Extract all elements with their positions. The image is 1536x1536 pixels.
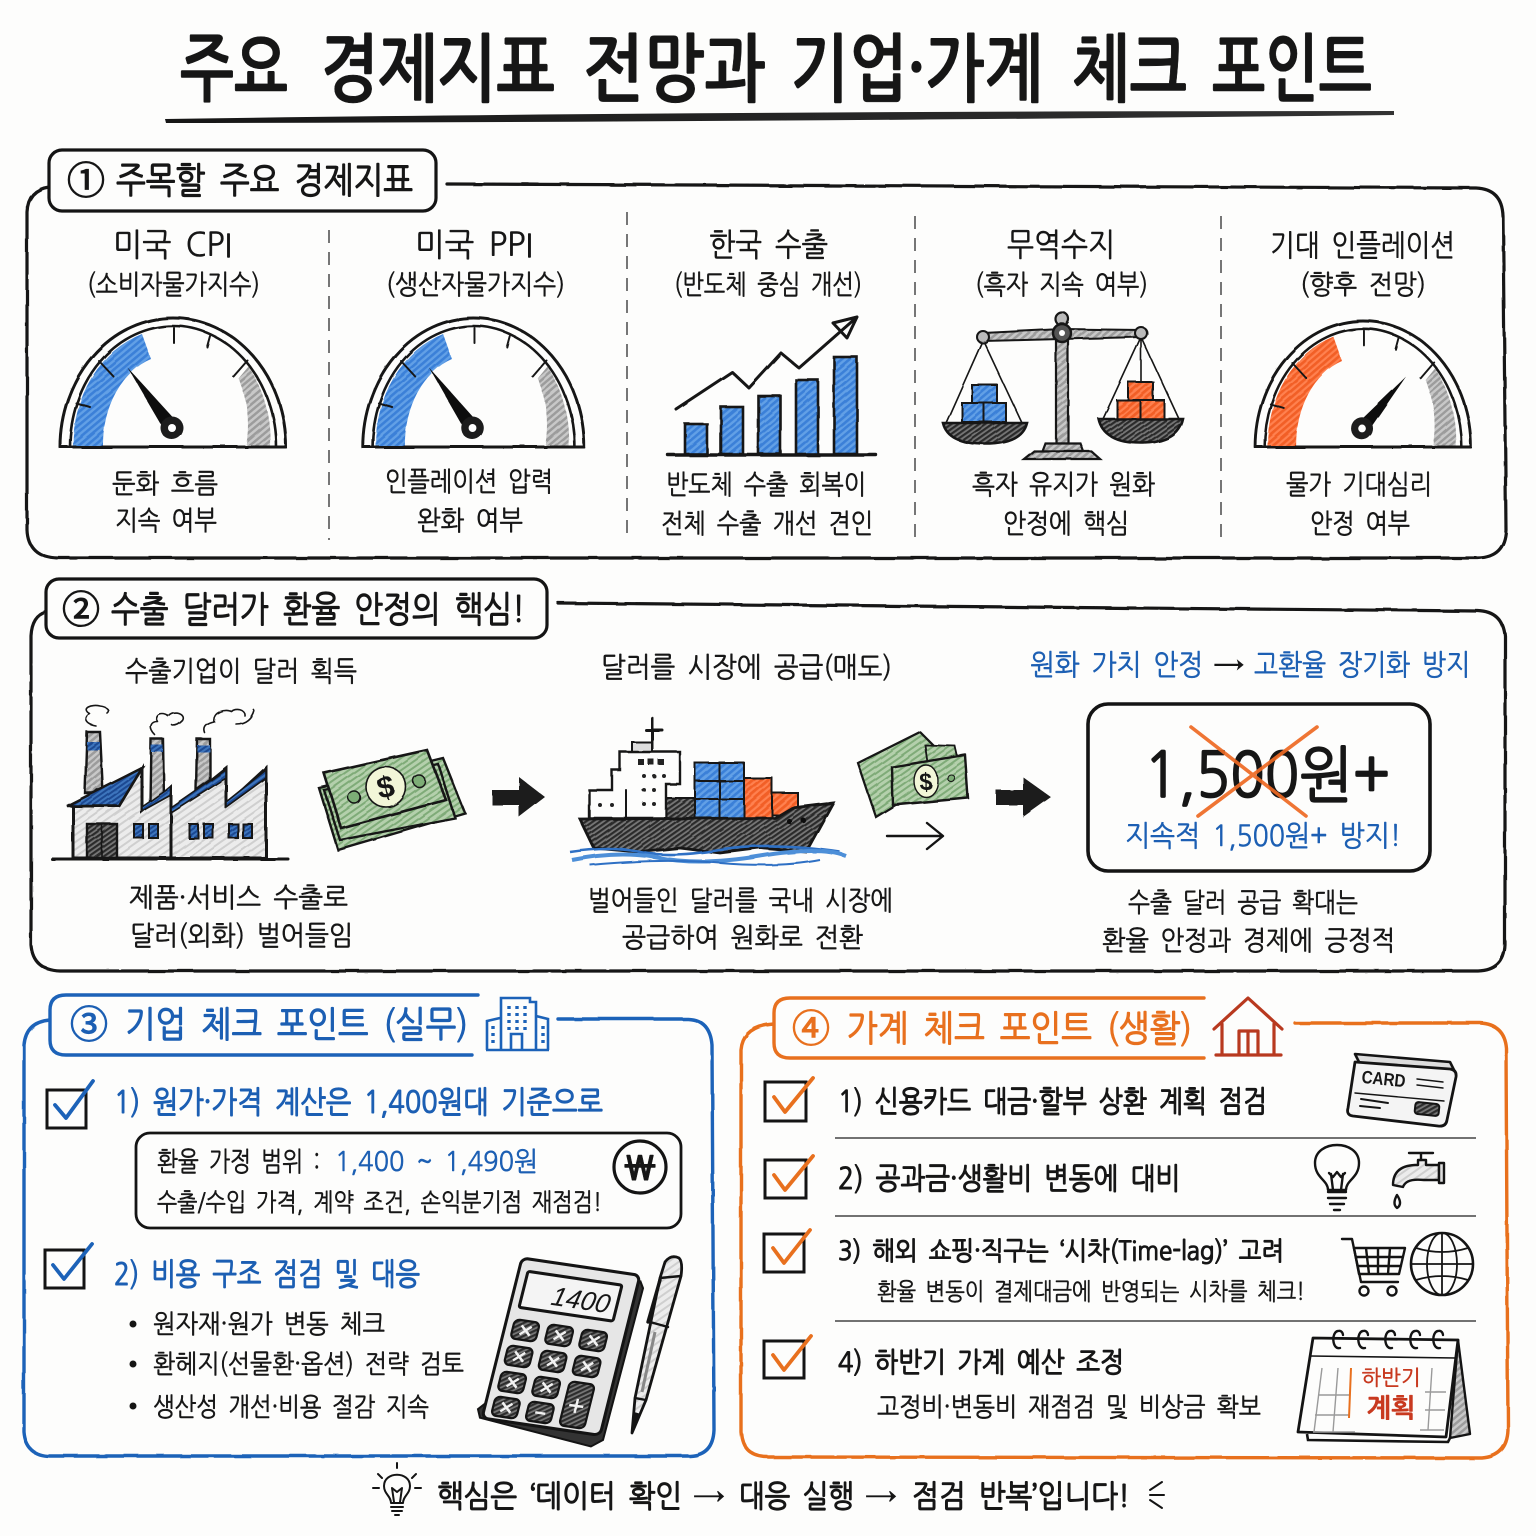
callout: prevent 1,500 won: 1,500원+ [1144, 744, 1390, 806]
checkbox [764, 1230, 810, 1272]
indicator: Korea exports [661, 229, 876, 537]
bullet list: 생산성 개선·비용 절감 지속 [153, 1394, 429, 1420]
icon: shopping cart [1342, 1239, 1405, 1296]
divider [835, 1137, 1476, 1139]
panel 3: business checkpoints [24, 995, 714, 1456]
icon: calendar [1298, 1331, 1470, 1442]
panel 1 heading: ① [67, 161, 105, 200]
checkbox [764, 1336, 811, 1378]
item 4: household budget [764, 1331, 1470, 1442]
panel 2 heading [46, 579, 547, 638]
indicator: US PPI: (생산자물가지수) [386, 271, 565, 298]
item 2 text: 2) 비용 구조 점검 및 대응 [114, 1259, 420, 1290]
accent marks [1150, 1482, 1164, 1508]
item 1 text: 1) 원가·가격 계산은 1,400원대 기준으로 [114, 1087, 603, 1118]
icon: cargo ship [570, 718, 846, 865]
panel 4 heading [774, 998, 1204, 1058]
indicator: US PPI: 인플레이션 압력 [385, 468, 553, 495]
indicator: US CPI: (소비자물가지수) [87, 271, 260, 298]
panel 3 heading [50, 995, 478, 1055]
checkbox 2 [45, 1244, 92, 1288]
icon: office building [486, 998, 549, 1050]
panel 4: household checkpoints [741, 998, 1508, 1458]
footer message: → [694, 1481, 724, 1512]
caption: result: 수출 달러 공급 확대는 [1128, 889, 1358, 916]
text: 1) 신용카드 대금·할부 상환 계획 점검 [838, 1086, 1267, 1117]
indicator: US PPI: 완화 여부 [417, 507, 523, 534]
panel 4 heading: 가계 체크 포인트 (생활) [847, 1011, 1192, 1047]
icon: dollar bills: $ [920, 769, 933, 795]
title: 체크 [1072, 32, 1187, 107]
panel 1: key indicators [27, 150, 1506, 558]
gauge: PPI [363, 318, 584, 447]
indicator: US CPI [60, 229, 286, 534]
bullet list: 원자재·원가 변동 체크 [153, 1311, 385, 1337]
footer message: 점검 반복’입니다! [912, 1481, 1130, 1512]
item 1: credit card [765, 1054, 1456, 1126]
exchange-rate assumption box: 수출/수입 가격, 계약 조건, 손익분기점 재점검! [157, 1190, 602, 1215]
step heading: stabilize won: 고환율 장기화 방지 [1254, 650, 1470, 680]
item 3: overseas shopping [764, 1230, 1473, 1304]
title: 포인트 [1212, 32, 1372, 107]
checkbox [765, 1078, 813, 1121]
bullet list [130, 1311, 464, 1420]
footer message: 대응 실행 [739, 1481, 854, 1512]
exchange-rate assumption box [136, 1133, 681, 1228]
divider [835, 1215, 1476, 1217]
bullet list: 환헤지(선물환·옵션) 전략 검토 [153, 1351, 464, 1377]
caption: exports: 달러(외화) 벌어들임 [130, 922, 353, 949]
icon: globe [1411, 1233, 1473, 1295]
indicator: expected inflation: 기대 인플레이션 [1270, 231, 1455, 261]
item 3: overseas shopping: 환율 변동이 결제대금에 반영되는 시차를 체크! [877, 1279, 1305, 1304]
panel 1 frame [27, 184, 1506, 558]
icon: house [1214, 998, 1282, 1055]
title: 경제지표 [320, 32, 555, 107]
step heading: supply dollars: 달러를 시장에 공급(매도) [601, 653, 892, 682]
title: 전망과 [583, 32, 765, 107]
indicator: expected inflation: 안정 여부 [1310, 510, 1410, 537]
caption: exports: 제품·서비스 수출로 [129, 884, 348, 911]
indicator: expected inflation: (향후 전망) [1300, 271, 1426, 298]
icon: pen [632, 1257, 682, 1433]
indicator: US PPI: 미국 PPI [415, 229, 533, 261]
step heading: stabilize won [1030, 650, 1470, 680]
panel 1 heading: 주목할 주요 경제지표 [116, 163, 413, 199]
panel 4 frame [741, 1023, 1508, 1458]
icon: calendar: 계획 [1367, 1395, 1415, 1421]
arrow: thin [887, 823, 943, 849]
title [180, 32, 1372, 107]
icon: calculator: 1400 [548, 1281, 614, 1319]
exchange-rate assumption box: 환율 가정 범위 : [157, 1148, 320, 1175]
arrow: ship to result [996, 777, 1051, 817]
indicator: expected inflation: 물가 기대심리 [1286, 471, 1432, 498]
icon: light bulb [1315, 1145, 1359, 1210]
panel 3 frame [24, 1019, 714, 1456]
arrow: factory to ship [492, 777, 545, 817]
step heading: earn dollars: 수출기업이 달러 획득 [125, 657, 357, 686]
chart: rising export bars [668, 317, 876, 455]
callout: prevent 1,500 won [1088, 704, 1430, 871]
panel 2 frame [31, 603, 1505, 971]
step heading: stabilize won: 원화 가치 안정 [1030, 650, 1203, 680]
indicator: trade balance [943, 229, 1183, 537]
icon: won coin [614, 1141, 666, 1193]
caption: supply: 공급하여 원화로 전환 [622, 924, 863, 951]
caption: result [1102, 889, 1395, 954]
icon: credit card: CARD [1361, 1067, 1407, 1091]
item 2: utilities [765, 1145, 1444, 1210]
gauge: CPI [60, 318, 286, 447]
icon: won coin: ₩ [623, 1152, 657, 1186]
title: 주요 [180, 34, 288, 107]
callout: prevent 1,500 won: 지속적 1,500원+ 방지! [1125, 822, 1401, 851]
icon: faucet [1393, 1153, 1444, 1208]
checkbox [765, 1156, 813, 1198]
gauge: expected inflation [1255, 321, 1471, 447]
panel 1 heading [49, 150, 436, 211]
indicator: trade balance: 무역수지 [1007, 229, 1115, 261]
item 1: cost and price [47, 1081, 603, 1128]
item 2: cost structure [45, 1244, 464, 1420]
caption: result: 환율 안정과 경제에 긍정적 [1102, 927, 1395, 954]
text: 3) 해외 쇼핑·직구는 ‘시차(Time-lag)’ 고려 [838, 1238, 1284, 1264]
indicator: US CPI: 미국 CPI [113, 229, 232, 261]
icon: balance scale [943, 312, 1183, 459]
caption: exports [129, 884, 353, 949]
text: 4) 하반기 가계 예산 조정 [838, 1348, 1124, 1377]
indicator: Korea exports: 한국 수출 [709, 229, 828, 261]
icon: factory [52, 705, 288, 859]
caption: supply: 벌어들인 달러를 국내 시장에 [588, 887, 893, 914]
item 4: household budget: 고정비·변동비 재점검 및 비상금 확보 [877, 1394, 1261, 1420]
indicator: Korea exports: (반도체 중심 개선) [674, 271, 862, 298]
panel 3 heading: ③ [70, 1005, 108, 1044]
text: 2) 공과금·생활비 변동에 대비 [838, 1163, 1180, 1194]
panel 2 heading: ② [62, 590, 100, 629]
icon: dollar stack [319, 750, 465, 850]
indicator: Korea exports: 전체 수출 개선 견인 [661, 510, 873, 537]
dashed column dividers [329, 212, 1221, 540]
icon: footer bulb [373, 1463, 421, 1515]
panel 2: export dollars [31, 579, 1505, 971]
checkbox 1 [47, 1081, 93, 1128]
title: 기업·가계 [790, 32, 1043, 107]
icon: credit card [1348, 1054, 1456, 1126]
indicator: trade balance: 안정에 핵심 [1003, 510, 1129, 537]
indicator: US CPI: 둔화 흐름 [112, 470, 218, 497]
icon: dollar bills [858, 732, 968, 817]
panel 3 heading: 기업 체크 포인트 (실무) [125, 1007, 468, 1043]
icon: calendar: 하반기 [1361, 1367, 1421, 1389]
icon: dollar stack: $ [374, 769, 398, 806]
footer message: 핵심은 ‘데이터 확인 [437, 1481, 682, 1512]
indicator: expected inflation [1255, 231, 1471, 537]
indicator: US CPI: 지속 여부 [115, 507, 217, 534]
footer message: → [866, 1481, 896, 1512]
title underline [165, 111, 1394, 123]
panel 2 heading: 수출 달러가 환율 안정의 핵심! [111, 591, 525, 628]
indicator: US PPI [363, 229, 584, 534]
indicator: trade balance: 흑자 유지가 원화 [972, 471, 1155, 498]
indicator: Korea exports: 반도체 수출 회복이 [666, 471, 866, 498]
footer message [373, 1463, 1164, 1515]
indicator: trade balance: (흑자 지속 여부) [975, 271, 1148, 298]
step heading: stabilize won: → [1214, 652, 1244, 680]
caption: supply [588, 887, 893, 951]
icon: calculator [473, 1257, 646, 1448]
divider [835, 1320, 1476, 1322]
exchange-rate assumption box: 1,400 ~ 1,490원 [335, 1148, 538, 1175]
panel 4 heading: ④ [792, 1009, 830, 1048]
